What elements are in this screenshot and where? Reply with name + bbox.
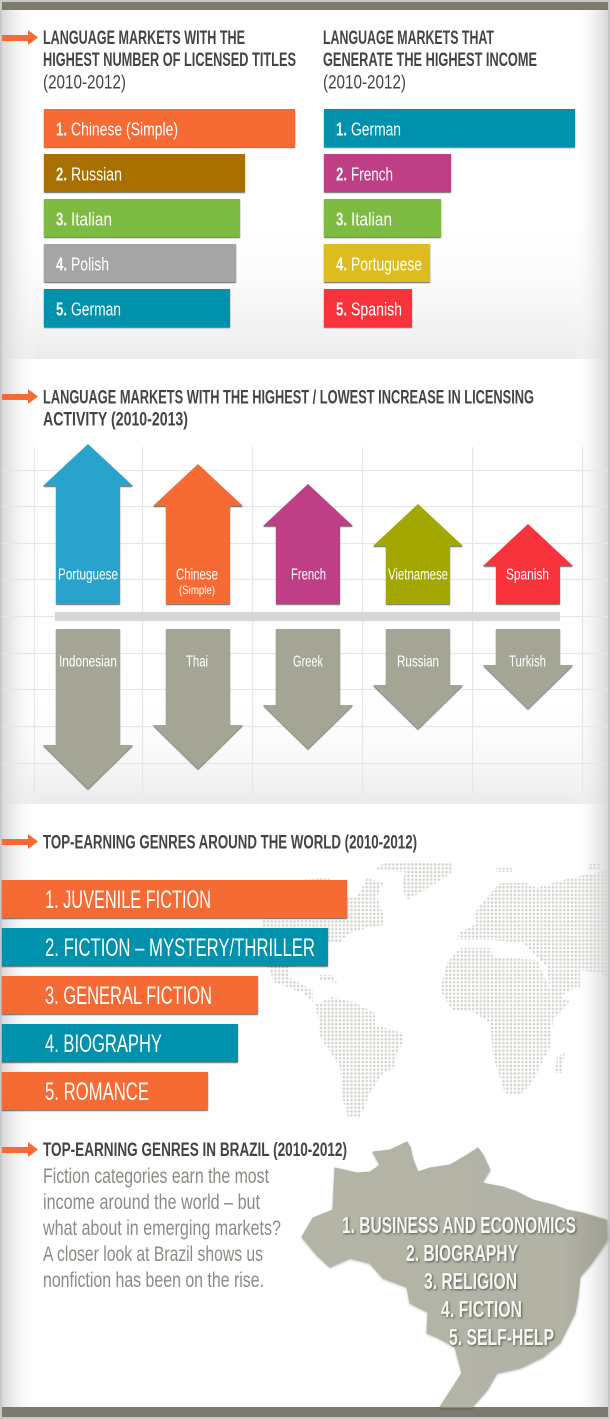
bar: French [324, 154, 451, 192]
bar: biography [2, 1024, 238, 1062]
list: Brazil genres: 4. FICTION [441, 1296, 522, 1322]
text block: Brazil intro: what about in emerging markets? [42, 1217, 281, 1240]
bar: Chinese (Simple): Chinese (Simple) [71, 120, 178, 140]
bar chart: income ranking [324, 109, 575, 327]
bar: Spanish: 5. [336, 300, 347, 320]
bar: juvenile fiction [2, 880, 347, 918]
bar: Portuguese: Portuguese [351, 254, 422, 274]
arrow: Chinese (Simple) [153, 464, 243, 604]
text block: Brazil intro: nonfiction has been on the rise. [43, 1269, 264, 1292]
icon: heading arrow 2 [2, 389, 38, 404]
bar: Polish: Polish [71, 254, 109, 274]
bar: Italian: Italian [351, 210, 392, 230]
bar: Italian: 3. [56, 210, 67, 230]
heading: highest income: LANGUAGE MARKETS THAT [323, 28, 494, 49]
center divider bar [55, 612, 560, 621]
panel: top licensing and income rankings [2, 10, 608, 359]
arrow: Spanish: Spanish [506, 566, 549, 584]
panel: licensing activity increase [2, 359, 608, 804]
bar: romance: 5. ROMANCE [45, 1078, 149, 1106]
heading: highest number of licensed titles: (2010-2012) [43, 72, 126, 94]
arrow: Russian [373, 629, 463, 729]
bar: fiction mystery/thriller [2, 928, 328, 966]
arrow: Turkish: Turkish [509, 654, 546, 670]
bar: Italian [44, 199, 240, 237]
arrow: Thai: Thai [186, 654, 208, 670]
list: Brazil genres: 5. SELF-HELP [449, 1324, 554, 1350]
bar: German [324, 109, 575, 147]
bar: Polish [44, 244, 236, 282]
bar: German: 1. [336, 120, 347, 140]
arrow: Turkish [483, 629, 573, 709]
top bar [2, 2, 608, 10]
icon: heading arrow 1 [2, 30, 38, 45]
arrow: Thai [153, 629, 243, 769]
arrow: Spanish [483, 524, 573, 604]
arrow: Greek [263, 629, 353, 749]
heading: highest number of licensed titles [43, 28, 296, 94]
bar: Spanish [324, 289, 412, 327]
heading: highest number of licensed titles: LANGUAGE MARKETS WITH THE [43, 28, 245, 49]
bar: Italian: Italian [71, 210, 112, 230]
list: Brazil genres: 2. BIOGRAPHY [406, 1240, 518, 1266]
arrow: Chinese (Simple): (Simple) [179, 583, 215, 597]
bar: Russian: Russian [71, 164, 122, 184]
bar: German: 5. [56, 300, 67, 320]
bar: French: French [351, 164, 393, 184]
icon: heading arrow 3 [2, 834, 38, 849]
bar: Portuguese [324, 244, 430, 282]
bar: Italian: 3. [336, 210, 347, 230]
heading: top-earning genres in Brazil: TOP-EARNING GENRES IN BRAZIL (2010-2012) [43, 1140, 347, 1161]
text block: Brazil intro: A closer look at Brazil shows us [43, 1243, 263, 1266]
bar: German [44, 289, 230, 327]
bar: Polish: 4. [56, 254, 67, 274]
heading: licensing activity: ACTIVITY (2010-2013) [43, 410, 188, 430]
bar: Chinese (Simple) [44, 109, 295, 147]
arrow: Vietnamese [373, 504, 463, 604]
map: Brazil [302, 1142, 608, 1407]
arrow: Vietnamese: Vietnamese [388, 566, 448, 584]
arrow: French [263, 484, 353, 604]
chart: up arrows [43, 444, 573, 604]
text block: Brazil intro [42, 1165, 281, 1292]
bar: French: 2. [336, 164, 347, 184]
icon: heading arrow 4 [2, 1142, 38, 1157]
arrow: Indonesian: Indonesian [59, 654, 117, 670]
bar: general fiction [2, 976, 258, 1014]
bar: Chinese (Simple): 1. [56, 120, 67, 140]
heading: highest number of licensed titles: HIGHEST NUMBER OF LICENSED TITLES [43, 50, 296, 71]
bar: Spanish: Spanish [351, 300, 402, 320]
chart: down arrows [43, 629, 573, 789]
bar: fiction mystery/thriller: 2. FICTION – MYSTERY/THRILLER [45, 934, 315, 962]
bar: Italian [324, 199, 441, 237]
heading: top-earning genres around the world: TOP-EARNING GENRES AROUND THE WORLD (2010-2012) [43, 832, 417, 854]
bar: German: German [351, 120, 401, 140]
bar: German: German [71, 300, 121, 320]
bar: general fiction: 3. GENERAL FICTION [45, 982, 212, 1010]
heading: highest income [323, 28, 537, 94]
bar: Portuguese: 4. [336, 254, 347, 274]
text block: Brazil intro: Fiction categories earn the most [43, 1165, 269, 1188]
heading: licensing activity [43, 388, 534, 430]
dotted world map [262, 862, 609, 1118]
bar: romance [2, 1072, 208, 1110]
bar: Russian [44, 154, 245, 192]
arrow: Chinese (Simple): Chinese [176, 566, 218, 584]
bar chart: licensed titles ranking [44, 109, 295, 327]
arrow: Russian: Russian [397, 654, 439, 670]
bottom bar [2, 1407, 608, 1417]
arrow: Portuguese: Portuguese [58, 566, 118, 584]
arrow: French: French [291, 566, 326, 584]
arrow: Indonesian [43, 629, 133, 789]
bar chart: world genres [2, 880, 347, 1110]
bar: biography: 4. BIOGRAPHY [45, 1030, 162, 1058]
arrow: Portuguese [43, 444, 133, 604]
bar: Russian: 2. [56, 164, 67, 184]
list: Brazil genres [342, 1212, 576, 1350]
text block: Brazil intro: income around the world – but [43, 1191, 260, 1214]
heading: highest income: (2010-2012) [323, 72, 406, 94]
panel: top-earning genres [2, 804, 608, 1407]
bar: juvenile fiction: 1. JUVENILE FICTION [45, 886, 211, 914]
list: Brazil genres: 3. RELIGION [424, 1268, 517, 1294]
arrow: Greek: Greek [293, 654, 324, 670]
